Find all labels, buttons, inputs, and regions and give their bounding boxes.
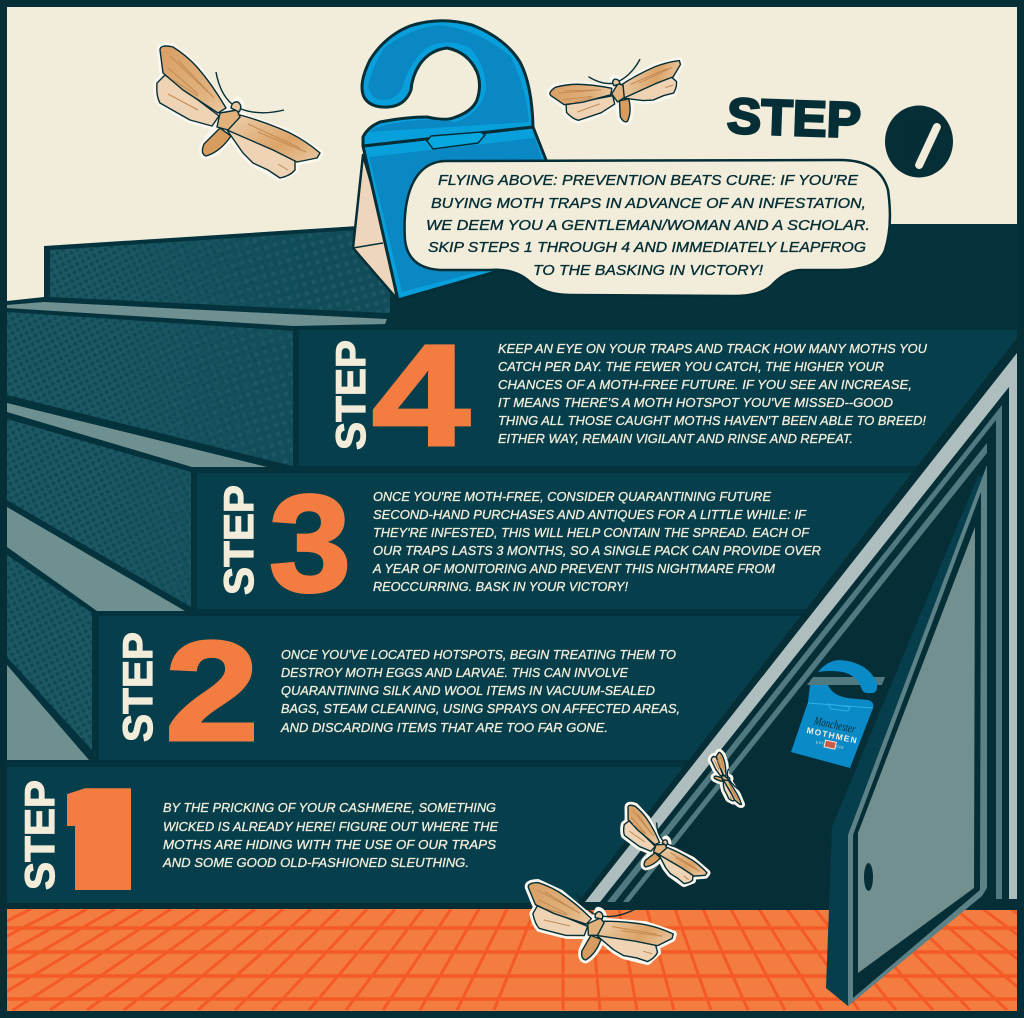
hanger body [791,685,873,768]
step 2 text: BAGS, STEAM CLEANING, USING SPRAYS ON AFFECTED AREAS, [281,701,680,716]
mini door hanger [791,660,885,768]
step 3 text: A YEAR OF MONITORING AND PREVENT THIS NIGHTMARE FROM [372,561,775,576]
staircase side walls [7,228,390,760]
step 4 text: CHANCES OF A MOTH-FREE FUTURE. IF YOU SEE AN INCREASE, [498,377,912,392]
wall patterns [7,228,390,750]
hook [362,21,533,146]
panel: step 1 [7,767,683,903]
bubble text: WE DEEM YOU A GENTLEMAN/WOMAN AND A SCHOLAR. [426,218,870,234]
tread 4 [7,302,387,326]
step 2 text [280,647,680,735]
step 1 text: AND SOME GOOD OLD-FASHIONED SLEUTHING. [162,855,469,870]
cream side flap [353,155,397,299]
moth mid [618,805,714,886]
tread 2 [7,507,185,611]
moth on floor [525,851,679,987]
step 4 text: THING ALL THOSE CAUGHT MOTHS HAVEN'T BEEN ABLE TO BREED! [498,413,926,428]
dark room mass [7,224,1017,910]
hanger handle [818,660,877,693]
moth small [700,751,757,808]
step 1 text: MOTHS ARE HIDING WITH THE USE OF OUR TRAPS [163,837,496,852]
step 3 text: OUR TRAPS LASTS 3 MONTHS, SO A SINGLE PACK CAN PROVIDE OVER [373,543,821,558]
bubble text [426,173,870,279]
heading word: STEP [726,88,862,148]
panel: step 2 [99,612,1017,771]
step 2 text: DESTROY MOTH EGGS AND LARVAE. THIS CAN INVOLVE [281,665,628,680]
door knob bar [807,677,885,685]
step 2 text: QUARANTINING SILK AND WOOL ITEMS IN VACUUM-SEALED [281,683,655,698]
front panel [363,127,550,300]
bubble text: FLYING ABOVE: PREVENTION BEATS CURE: IF YOU'RE [438,173,858,189]
step 4 numeral: 4 [372,315,470,476]
large door hanger trap [353,21,550,300]
step 4 text: EITHER WAY, REMAIN VIGILANT AND RINSE AND REPEAT. [498,431,853,446]
panel: step 3 [197,467,1017,621]
panel: step 4 [299,315,1017,476]
step 4 label: STEP [327,340,374,450]
bubble text: TO THE BASKING IN VICTORY! [533,263,763,279]
cream wall [7,7,1017,307]
step 1 text [162,800,498,870]
inner frame band [623,443,987,902]
speech bubble [405,160,890,296]
zero numeral: 0 [903,110,935,173]
step 2 text: ONCE YOU'VE LOCATED HOTSPOTS, BEGIN TREATING THEM TO [281,647,676,662]
mid frame band [607,405,1002,902]
step 4 text: KEEP AN EYE ON YOUR TRAPS AND TRACK HOW MANY MOTHS YOU [498,341,928,356]
tag text: MOTHMEN [806,725,858,745]
light frame band [585,353,1017,902]
tag text: Manchester [812,713,857,736]
heading: step 0 [726,88,953,178]
step 4 text: CATCH PER DAY. THE FEWER YOU CATCH, THE HIGHER YOUR [498,359,884,374]
step 1 numeral: 1 [37,775,164,905]
step 3 label: STEP [215,485,262,595]
tag text: EST. 2018 [815,740,844,750]
step 3 text: ONCE YOU'RE MOTH-FREE, CONSIDER QUARANTINING FUTURE [373,489,771,504]
step 4 text [498,341,928,446]
step 2 text: AND DISCARDING ITEMS THAT ARE TOO FAR GONE. [280,720,608,735]
step 3 text: SECOND-HAND PURCHASES AND ANTIQUES FOR A LITTLE WHILE: IF [373,507,807,522]
moth top right [547,10,692,157]
tab [427,132,485,149]
step 2 label: STEP [114,632,161,742]
orange tiled floor [0,909,1024,1011]
tread 3 [7,403,267,467]
tag text [804,712,860,753]
step 4 text: IT MEANS THERE'S A MOTH HOTSPOT YOU'VE MISSED--GOOD [498,395,893,410]
bubble text: SKIP STEPS 1 THROUGH 4 AND IMMEDIATELY LEAPFROG [428,240,866,256]
open door [826,465,987,1006]
step 1 text: BY THE PRICKING OF YOUR CASHMERE, SOMETHING [163,800,496,815]
zero numeral [885,106,953,178]
door frame and dark room [572,338,1017,910]
step 3 text: THEY'RE INFESTED, THIS WILL HELP CONTAIN THE SPREAD. EACH OF [373,525,810,540]
bubble text: BUYING MOTH TRAPS IN ADVANCE OF AN INFESTATION, [431,196,866,212]
step 1 text: WICKED IS ALREADY HERE! FIGURE OUT WHERE THE [163,819,498,834]
step 3 text: REOCCURRING. BASK IN YOUR VICTORY! [373,579,628,594]
door handle [864,863,873,891]
step 1 label: STEP [16,780,63,890]
step 2 numeral: 2 [165,612,259,771]
step 3 numeral: 3 [269,467,351,621]
step 3 text [372,489,821,594]
tread 1 [7,665,89,760]
moth top left [157,46,320,178]
dark gap below step 1 [7,903,1017,910]
